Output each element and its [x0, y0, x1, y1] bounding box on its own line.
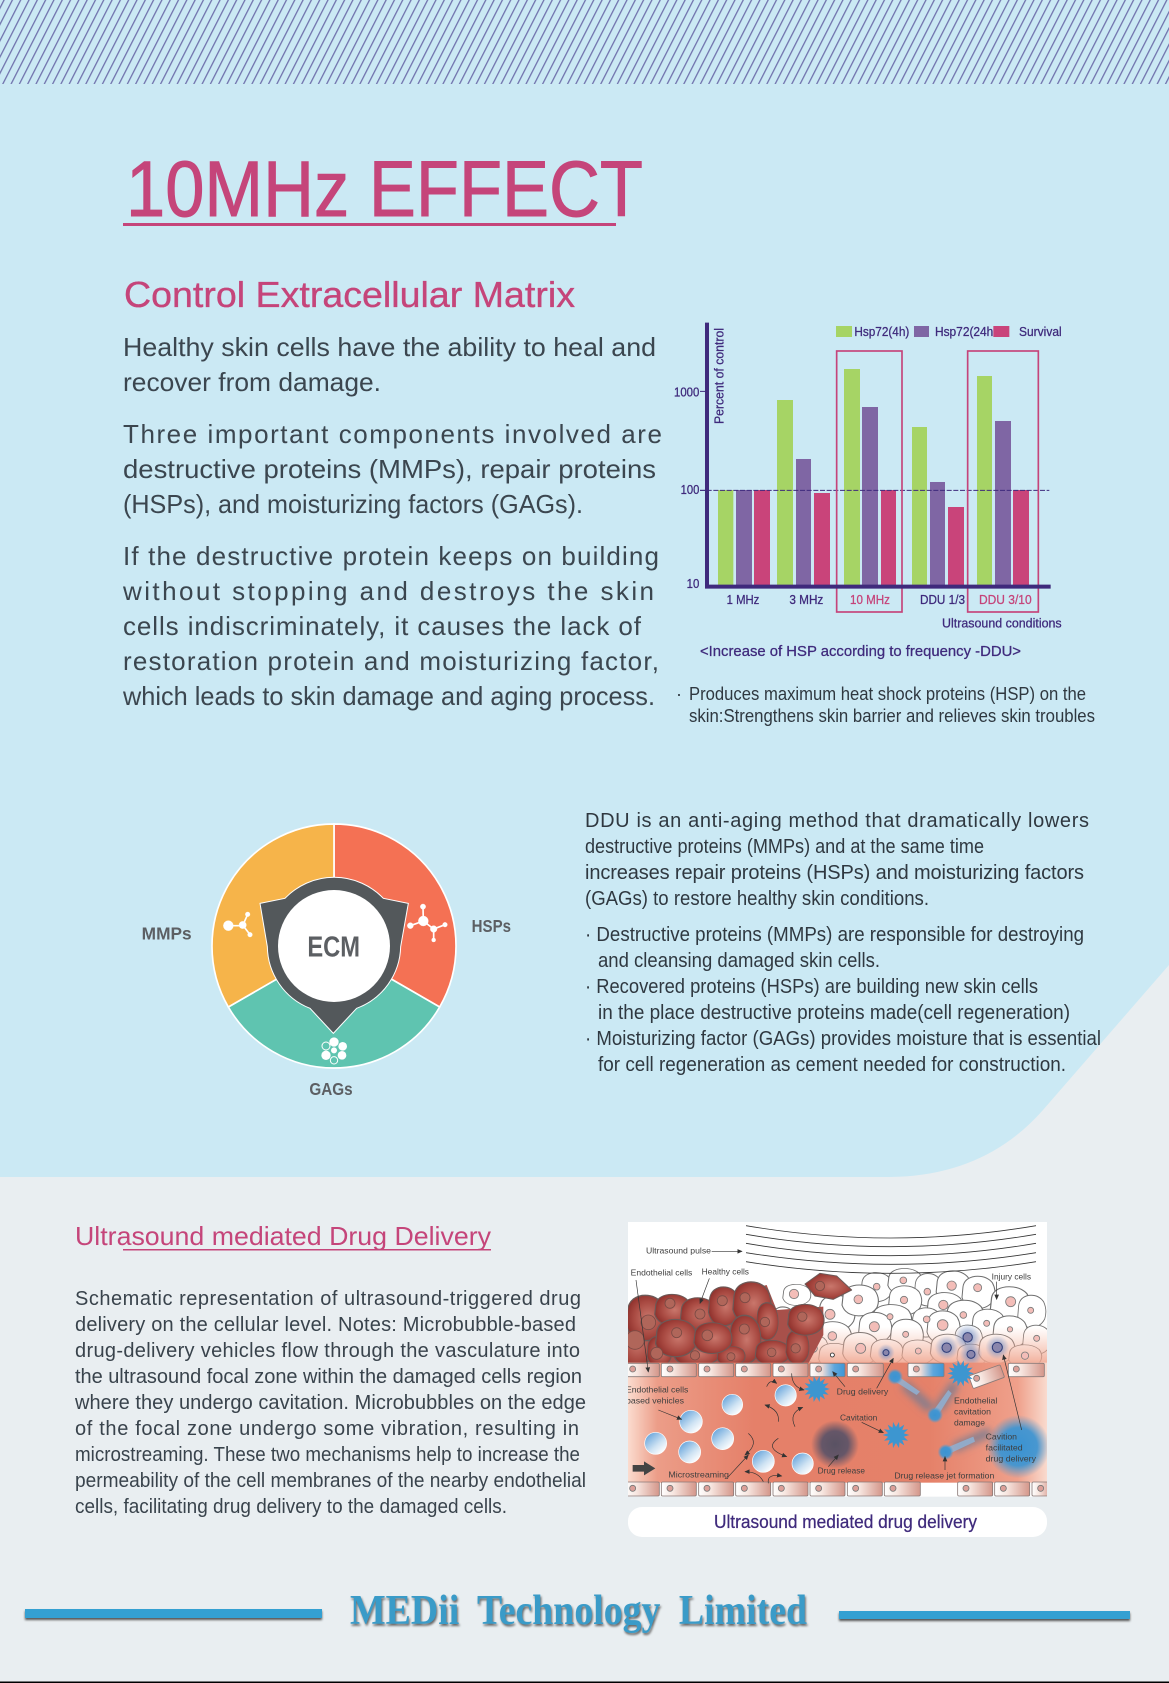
bullet list: protein roles: for cell regeneration as cement needed for construction.: [598, 1054, 1066, 1076]
text block: schematic description: microstreaming. These two mechanisms help to increase the: [75, 1444, 580, 1466]
brown cell nuclei: [626, 1281, 825, 1361]
text block: skin cells intro: without stopping and destroys the skin: [122, 576, 654, 606]
axes: [700, 323, 1051, 587]
illustration labels: damage: [954, 1418, 985, 1428]
bullet: maximum heat shock proteins: skin:Strengthens skin barrier and relieves skin troubles: [689, 706, 1095, 726]
text block: schematic description: of the focal zone undergo some vibration, resulting in: [75, 1418, 579, 1440]
y axis labels: 10: [687, 577, 699, 591]
bullet list: protein roles: [585, 924, 1101, 1076]
icon: HSP molecule: [407, 904, 447, 942]
bottom edge: [0, 1682, 1169, 1683]
y axis title: Percent of control: [712, 328, 726, 424]
chart legend: Hsp72(4h): [854, 325, 909, 339]
text block: DDU explanation: (GAGs) to restore healthy skin conditions.: [585, 888, 929, 910]
text block: skin cells intro: If the destructive protein keeps on building: [123, 541, 659, 571]
label: HSPs: HSPs: [472, 916, 511, 936]
x axis labels: 1 MHz: [727, 593, 759, 607]
ECM label: ECM: [307, 932, 360, 964]
text block: skin cells intro: Three important components involved are: [123, 419, 662, 449]
center hub: [260, 877, 408, 1033]
illustration caption pill: Ultrasound mediated drug delivery: [714, 1512, 977, 1532]
text block: skin cells intro: Healthy skin cells have the ability to heal and: [123, 332, 656, 362]
y axis labels: [674, 386, 699, 591]
illustration labels: Injury cells: [992, 1271, 1032, 1281]
endothelial nuclei: [630, 1366, 1044, 1491]
text block: schematic description: [74, 1288, 586, 1518]
illustration: ultrasound drug delivery: [616, 1222, 1052, 1497]
x axis labels: 3 MHz: [789, 593, 823, 607]
drug release clouds and jets: [811, 1369, 1050, 1478]
x axis labels: DDU 3/10: [979, 593, 1032, 607]
x axis labels: DDU 1/3: [920, 593, 965, 607]
illustration labels: facilitated: [986, 1443, 1023, 1453]
tint over lower cells: [808, 1329, 1047, 1363]
segment: HSPs: [334, 824, 456, 1007]
text block: skin cells intro: restoration protein and moisturizing factor,: [123, 646, 659, 676]
text block: schematic description: delivery on the cellular level. Notes: Microbubble-based: [75, 1314, 576, 1336]
illustration labels: Endothelial: [954, 1396, 997, 1406]
illustration labels: drug delivery: [986, 1454, 1037, 1464]
x axis labels: 10 MHz: [850, 593, 890, 607]
footer company name: MEDii Technology Limited: [350, 1588, 807, 1634]
chart legend: Survival: [1019, 325, 1062, 339]
illustration labels: Cavition: [986, 1431, 1017, 1441]
ECM donut diagram: [142, 824, 511, 1099]
illustration labels: Endothelial cells: [626, 1385, 689, 1395]
x axis labels: [727, 593, 1032, 607]
lower endothelial cells: [625, 1482, 1052, 1496]
chart caption: <Increase of HSP according to frequency -DDU>: [700, 643, 1021, 660]
illustration labels: Drug release: [818, 1466, 865, 1476]
bullet list: protein roles: · Destructive proteins (MMPs) are responsible for destroying: [585, 924, 1084, 946]
text block: skin cells intro: (HSPs), and moisturizing factors (GAGs).: [123, 489, 583, 519]
illustration labels: Microstreaming: [668, 1470, 729, 1480]
chart legend: Hsp72(24h: [935, 325, 993, 339]
text block: DDU explanation: DDU is an anti-aging method that dramatically lowers: [585, 810, 1089, 832]
cavitation bursts: [803, 1360, 974, 1448]
bullet list: protein roles: in the place destructive proteins made(cell regeneration): [598, 1002, 1070, 1024]
text block: skin cells intro: cells indiscriminately, it causes the lack of: [123, 611, 642, 641]
icon: MMP molecule: [223, 912, 252, 937]
text block: schematic description: permeability of the cell membranes of the nearby endothelial: [75, 1470, 586, 1492]
callout arrows: [636, 1251, 1022, 1483]
illustration labels: Drug delivery: [837, 1386, 889, 1396]
illustration labels: Healthy cells: [702, 1266, 750, 1276]
bars: [718, 369, 1029, 585]
highlight boxes: [837, 351, 1038, 612]
title: 10MHz EFFECT: [126, 144, 643, 233]
footer left rule: [25, 1609, 322, 1618]
reference line at 100: [700, 489, 1049, 492]
subtitle: control extracellular matrix: Control Extracellular Matrix: [124, 274, 575, 315]
text block: skin cells intro: [122, 332, 662, 711]
flow arrow: [633, 1461, 655, 1475]
bullet list: protein roles: · Moisturizing factor (GAGs) provides moisture that is essential: [585, 1028, 1101, 1050]
white injured cells: [770, 1269, 1051, 1368]
illustration labels: based vehicles: [626, 1395, 685, 1405]
text block: skin cells intro: recover from damage.: [123, 367, 381, 397]
bullet: maximum heat shock proteins: ·: [676, 684, 682, 704]
text block: DDU explanation: increases repair proteins (HSPs) and moisturizing factors: [585, 862, 1084, 884]
blue upper panel: [0, 0, 1169, 1177]
white cell nuclei: [775, 1277, 1040, 1359]
chart legend: [836, 325, 1062, 339]
text block: skin cells intro: destructive proteins (MMPs), repair proteins: [123, 454, 656, 484]
blood vessel: [628, 1363, 1047, 1483]
ultrasound pulse waves: [746, 1226, 1036, 1273]
segment: MMPs: [212, 824, 334, 1007]
upper endothelial cells: [625, 1363, 1044, 1389]
microbubbles: [645, 1385, 813, 1474]
drug-loaded nuclei: [830, 1324, 1009, 1366]
text block: DDU explanation: [585, 810, 1089, 910]
illustration labels: Endothelial cells: [631, 1267, 693, 1277]
illustration caption pill: [628, 1507, 1047, 1537]
bullet: maximum heat shock proteins: [676, 684, 1095, 726]
y axis labels: 100: [681, 483, 699, 497]
illustration labels: [626, 1245, 1037, 1480]
healthy brown cells: [616, 1273, 852, 1367]
illustration labels: cavitation: [954, 1407, 991, 1417]
text block: schematic description: cells, facilitating drug delivery to the damaged cells.: [75, 1496, 507, 1518]
segment: GAGs: [228, 946, 440, 1068]
bar chart: HSP by frequency: [674, 323, 1062, 660]
x axis title: Ultrasound conditions: [942, 617, 1062, 631]
text block: schematic description: Schematic representation of ultrasound-triggered drug: [75, 1288, 581, 1310]
bullet list: protein roles: · Recovered proteins (HSPs) are building new skin cells: [585, 976, 1038, 998]
text block: DDU explanation: destructive proteins (MMPs) and at the same time: [585, 836, 984, 858]
y axis labels: 1000: [674, 386, 699, 400]
text block: schematic description: the ultrasound focal zone within the damaged cells region: [75, 1366, 582, 1388]
heading: ultrasound mediated drug delivery: Ultrasound mediated Drug Delivery: [75, 1221, 491, 1251]
hatched top band: [0, 0, 1169, 84]
footer right rule: [839, 1611, 1130, 1619]
text block: skin cells intro: which leads to skin damage and aging process.: [122, 681, 655, 711]
illustration labels: Ultrasound pulse: [646, 1245, 711, 1255]
text block: schematic description: drug-delivery vehicles flow through the vasculature into: [75, 1340, 580, 1362]
bullet list: protein roles: and cleansing damaged skin cells.: [598, 950, 880, 972]
icon: GAG hexagon cluster: [321, 1037, 347, 1064]
illustration labels: Drug release jet formation: [894, 1470, 995, 1480]
label: GAGs: GAGs: [309, 1079, 353, 1099]
bullet: maximum heat shock proteins: Produces maximum heat shock proteins (HSP) on the: [689, 684, 1086, 704]
illustration labels: Cavitation: [840, 1412, 878, 1422]
label: MMPs: MMPs: [142, 923, 192, 943]
text block: schematic description: where they undergo cavitation. Microbubbles on the edge: [74, 1392, 586, 1414]
